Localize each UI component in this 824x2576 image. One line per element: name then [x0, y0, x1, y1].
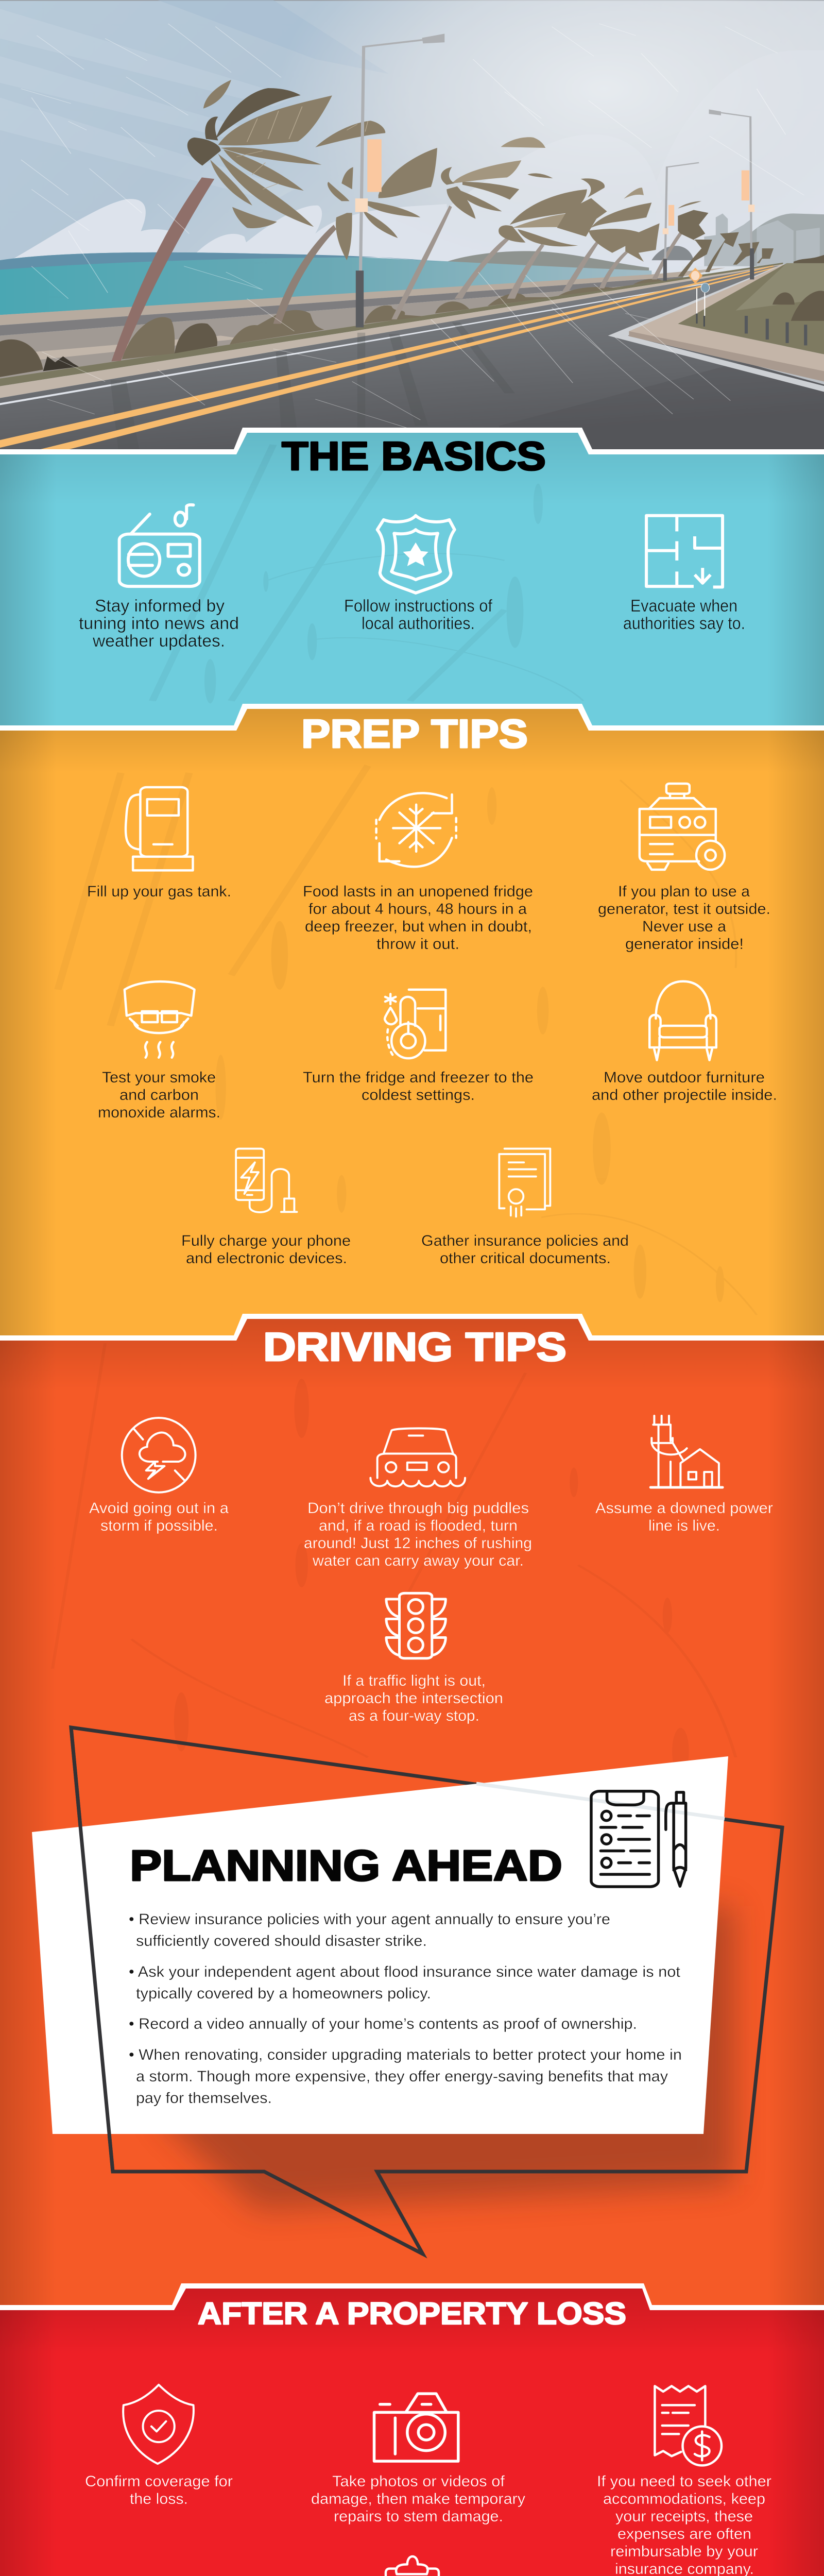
panel: after a property loss: [0, 2283, 824, 2576]
shrubs along the seawall: [0, 279, 662, 377]
text: confirm coverage: Confirm coverage for: [85, 2473, 233, 2490]
haze: [263, 0, 824, 266]
text: follow instructions: local authorities.: [362, 614, 475, 633]
icon: documents: [499, 1149, 550, 1216]
text: planning bullet list: [129, 1911, 682, 2107]
icon: floor plan with exit: [646, 516, 723, 587]
text: coldest settings: [303, 1069, 534, 1104]
callout: planning ahead: [32, 1727, 782, 2254]
text: take photos: Take photos or videos of: [332, 2473, 505, 2490]
panel: prep tips: [0, 704, 824, 1345]
text: fridge food: throw it out.: [376, 936, 459, 953]
text: generator: generator inside!: [625, 936, 744, 953]
street lamps with banners: [355, 33, 754, 327]
text: planning bullet list: • When renovating, consider upgrading materials to better protect your home in: [129, 2046, 682, 2063]
icon: clipboard and pen: [591, 1791, 686, 1887]
text: outdoor furniture: [592, 1069, 777, 1104]
icon: snowflake cycle: [376, 793, 456, 867]
clouds: [10, 50, 824, 272]
reflections on the road: [110, 323, 515, 449]
text: confirm coverage: the loss.: [130, 2490, 188, 2507]
text: fridge food: deep freezer, but when in doubt,: [305, 918, 532, 935]
heading: prep tips: PREP TIPS: [301, 711, 528, 756]
text: take photos: repairs to stem damage.: [334, 2508, 503, 2525]
right corner kerb and embankment: [608, 264, 824, 392]
text: alarms: monoxide alarms.: [98, 1104, 220, 1121]
text: evacuate: authorities say to.: [623, 614, 745, 633]
roadside signs: [689, 267, 710, 327]
text: alarms: Test your smoke: [102, 1069, 216, 1086]
palm tree 3: [391, 137, 553, 319]
text: outdoor furniture: Move outdoor furniture: [604, 1069, 765, 1086]
text: gather documents: other critical documents.: [440, 1250, 611, 1267]
text: power line: line is live.: [648, 1517, 720, 1534]
text: receipts: [597, 2473, 771, 2576]
palm trees 4 to 6: [455, 178, 660, 299]
text: fridge food: Food lasts in an unopened fridge: [303, 883, 533, 900]
text: charge phone: Fully charge your phone: [181, 1232, 351, 1249]
text: take photos: [311, 2473, 525, 2525]
text: puddles: and, if a road is flooded, turn: [319, 1517, 518, 1534]
text: avoid going out: storm if possible.: [100, 1517, 218, 1534]
heading: driving tips: DRIVING TIPS: [263, 1324, 566, 1369]
icon: receipt with dollar: [655, 2386, 722, 2465]
icon: storm warning: [122, 1418, 196, 1493]
panel: the basics: [0, 428, 824, 732]
panel: driving tips: [0, 1314, 824, 2313]
text: fridge food: for about 4 hours, 48 hours in a: [308, 901, 527, 918]
sea: [0, 252, 651, 315]
heading: the basics: THE BASICS: [282, 433, 546, 479]
seawall: [0, 267, 725, 325]
text: fridge food: [303, 883, 533, 953]
grass verge and pavement: [0, 263, 783, 386]
text: gather documents: Gather insurance policies and: [421, 1232, 629, 1249]
text: planning bullet list: • Record a video annually of your home’s contents as proof of ownership.: [129, 2015, 637, 2032]
rain streaks: [21, 24, 804, 429]
text: puddles: [304, 1500, 532, 1569]
heading: planning ahead: PLANNING AHEAD: [130, 1841, 562, 1890]
text: generator: [598, 883, 770, 953]
text: receipts: expenses are often: [617, 2526, 751, 2543]
icon: downed power line: [650, 1416, 723, 1487]
text: receipts: If you need to seek other: [597, 2473, 771, 2490]
text: stay informed: weather updates.: [92, 631, 225, 650]
palm tree 1: [111, 80, 385, 361]
distant palm trees: [651, 201, 774, 279]
double yellow road lines: [0, 265, 779, 449]
embankment shrubs and posts: [745, 255, 824, 345]
text: gas tank: Fill up your gas tank.: [87, 883, 231, 900]
text: planning bullet list: • Ask your independent agent about flood insurance since water damage is not: [129, 1963, 681, 1980]
road: [0, 265, 824, 452]
far hills and city: [447, 213, 824, 277]
icon: radio: [119, 505, 200, 586]
text: confirm coverage: [85, 2473, 233, 2507]
text: traffic light: as a four-way stop.: [349, 1707, 479, 1724]
text: avoid going out: [89, 1500, 229, 1534]
hero illustration: storm on a coastal road: [0, 0, 824, 452]
icon: fridge thermometer: [385, 990, 445, 1058]
icon: armchair: [649, 981, 716, 1060]
icon: shield check: [123, 2385, 194, 2464]
text: puddles: around! Just 12 inches of rushing: [304, 1535, 532, 1552]
text: evacuate: [623, 596, 745, 633]
heading: after a property loss: AFTER A PROPERTY LOSS: [198, 2296, 626, 2331]
text: planning bullet list: a storm. Though more expensive, they offer energy-saving benefits that may: [136, 2068, 668, 2085]
text: power line: Assume a downed power: [595, 1500, 773, 1517]
text: coldest settings: coldest settings.: [362, 1087, 475, 1104]
text: alarms: and carbon: [119, 1087, 199, 1104]
icon: generator: [640, 784, 725, 870]
text: planning bullet list: typically covered by a homeowners policy.: [136, 1985, 431, 2002]
text: stay informed: Stay informed by: [95, 596, 225, 615]
text: traffic light: If a traffic light is out,: [342, 1672, 486, 1689]
text: receipts: reimbursable by your: [610, 2543, 758, 2560]
text: gather documents: [421, 1232, 629, 1267]
text: planning bullet list: pay for themselves.: [136, 2090, 272, 2107]
text: outdoor furniture: and other projectile inside.: [592, 1087, 777, 1104]
text: generator: If you plan to use a: [618, 883, 750, 900]
icon: phone and charger: [236, 1149, 297, 1212]
text: charge phone: and electronic devices.: [186, 1250, 347, 1267]
text: avoid going out: Avoid going out in a: [89, 1500, 229, 1517]
text: puddles: water can carry away your car.: [312, 1552, 524, 1569]
text: alarms: [98, 1069, 220, 1121]
icon: clipboard checklist: [386, 2556, 456, 2576]
text: generator: generator, test it outside.: [598, 901, 770, 918]
text: coldest settings: Turn the fridge and freezer to the: [303, 1069, 534, 1086]
icon: police badge: [377, 516, 455, 593]
text: charge phone: [181, 1232, 351, 1267]
text: take photos: damage, then make temporary: [311, 2490, 525, 2507]
icon: traffic light: [386, 1593, 445, 1658]
text: stay informed: [79, 596, 239, 650]
text: evacuate: Evacuate when: [630, 596, 737, 615]
text: traffic light: approach the intersection: [324, 1690, 503, 1707]
icon: smoke alarm: [125, 981, 195, 1058]
text: receipts: accommodations, keep: [603, 2490, 765, 2507]
text: planning bullet list: sufficiently covered should disaster strike.: [136, 1933, 427, 1950]
text: follow instructions: [344, 596, 493, 633]
text: planning bullet list: • Review insurance policies with your agent annually to ensure you’re: [129, 1911, 610, 1928]
text: follow instructions: Follow instructions of: [344, 596, 493, 615]
icon: car in flood water: [370, 1428, 465, 1486]
text: power line: [595, 1500, 773, 1534]
text: receipts: your receipts, these: [615, 2508, 753, 2525]
text: puddles: Don’t drive through big puddles: [307, 1500, 529, 1517]
icon: gas pump: [126, 787, 193, 870]
palm tree 2: [273, 148, 437, 324]
text: stay informed: tuning into news and: [79, 614, 239, 633]
text: generator: Never use a: [642, 918, 726, 935]
icon: camera: [374, 2394, 458, 2461]
text: traffic light: [324, 1672, 503, 1724]
